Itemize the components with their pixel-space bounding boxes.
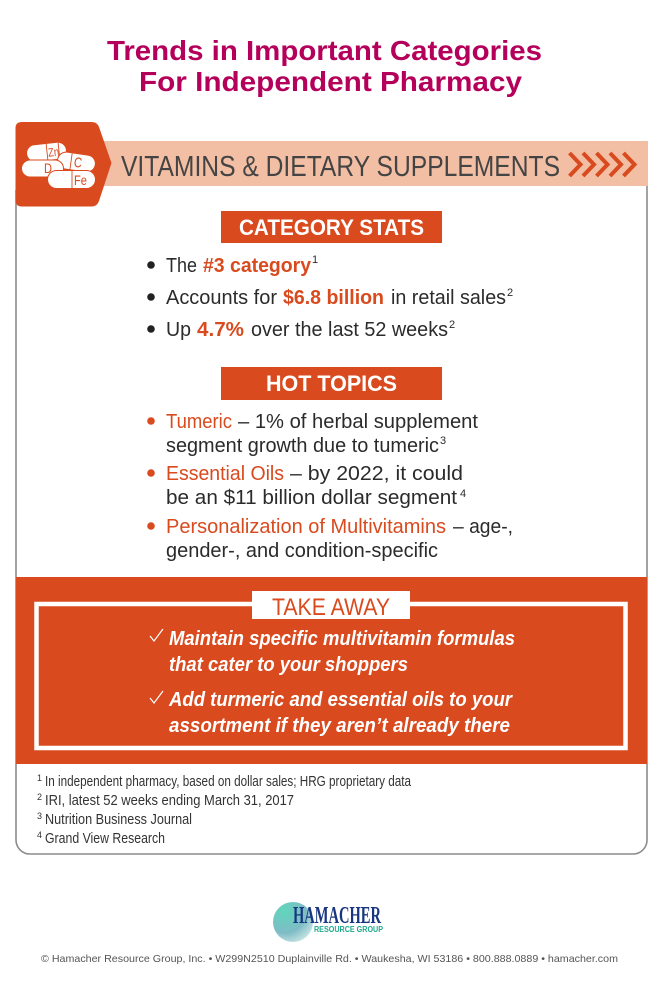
icon: chevrons bbox=[570, 153, 634, 176]
pill D: D bbox=[44, 160, 52, 176]
text block: hot topics list: segment growth due to tumeric bbox=[166, 435, 439, 457]
text block: hot topics list: 3 bbox=[440, 435, 446, 447]
text block: category stats list: Accounts for bbox=[166, 287, 277, 309]
footnotes: 4 bbox=[37, 830, 42, 840]
take away items bbox=[150, 628, 515, 737]
panel: card outline bbox=[16, 180, 647, 854]
footnotes bbox=[37, 773, 412, 847]
text block: hot topics list bbox=[147, 411, 513, 562]
text block: hot topics list: Tumeric bbox=[166, 411, 232, 433]
text block: category stats list: The bbox=[166, 255, 197, 277]
take away items: Add turmeric and essential oils to your bbox=[168, 689, 513, 711]
footnotes: IRI, latest 52 weeks ending March 31, 2017 bbox=[45, 792, 294, 809]
title bbox=[107, 35, 542, 97]
take away items: that cater to your shoppers bbox=[169, 654, 408, 676]
heading: category stats: CATEGORY STATS bbox=[239, 215, 424, 240]
text block: category stats list: 2 bbox=[449, 319, 455, 331]
text block: hot topics list: 4 bbox=[460, 488, 466, 500]
logo bbox=[273, 902, 384, 942]
logo: HAMACHER bbox=[293, 903, 381, 929]
text block: category stats list: in retail sales bbox=[391, 287, 506, 309]
take away label: TAKE AWAY bbox=[272, 594, 390, 621]
text block: hot topics list: gender-, and condition-specific bbox=[166, 540, 438, 562]
header text: VITAMINS & DIETARY SUPPLEMENTS bbox=[121, 151, 560, 183]
heading: hot topics: HOT TOPICS bbox=[266, 371, 397, 396]
text block: category stats list: #3 category bbox=[203, 255, 312, 277]
text block: hot topics list: – age-, bbox=[453, 516, 513, 538]
panel: take away bbox=[16, 577, 647, 764]
header band bbox=[100, 141, 648, 186]
text block: category stats list: 2 bbox=[507, 287, 513, 299]
text block: hot topics list: – by 2022, it could bbox=[290, 463, 463, 485]
text block: category stats list: $6.8 billion bbox=[283, 287, 384, 309]
footnotes: 3 bbox=[37, 811, 42, 821]
heading: category stats bbox=[221, 211, 442, 243]
title: Trends in Important Categories bbox=[107, 35, 542, 66]
text block: category stats list bbox=[147, 254, 513, 341]
take away items: assortment if they aren’t already there bbox=[169, 715, 510, 737]
take away items: Maintain specific multivitamin formulas bbox=[169, 628, 515, 650]
footnotes: 2 bbox=[37, 792, 42, 802]
pill Fe: Fe bbox=[74, 172, 87, 188]
footnotes: 1 bbox=[37, 773, 42, 783]
text block: hot topics list: – 1% of herbal supplement bbox=[238, 411, 478, 433]
footnotes: Grand View Research bbox=[45, 830, 165, 847]
text block: category stats list: over the last 52 weeks bbox=[251, 319, 448, 341]
footnotes: In independent pharmacy, based on dollar sales; HRG proprietary data bbox=[45, 773, 412, 790]
text block: hot topics list: be an $11 billion dollar segment bbox=[166, 487, 457, 509]
logo: RESOURCE GROUP bbox=[314, 925, 384, 934]
heading: hot topics bbox=[221, 367, 442, 400]
text block: category stats list: 1 bbox=[312, 254, 318, 266]
text block: category stats list: Up bbox=[166, 319, 191, 341]
footer address: © Hamacher Resource Group, Inc. • W299N2510 Duplainville Rd. • Waukesha, WI 53186 • 800.888.0889 • hamacher.com bbox=[41, 953, 618, 965]
pill C: C bbox=[73, 154, 83, 171]
pill Zn: Zn bbox=[47, 145, 60, 160]
text block: category stats list: 4.7% bbox=[197, 319, 244, 341]
title: For Independent Pharmacy bbox=[139, 66, 522, 97]
footnotes: Nutrition Business Journal bbox=[45, 811, 192, 828]
icon: pills flag bbox=[16, 122, 112, 206]
text block: hot topics list: Personalization of Multivitamins bbox=[166, 516, 446, 538]
text block: hot topics list: Essential Oils bbox=[166, 463, 284, 485]
